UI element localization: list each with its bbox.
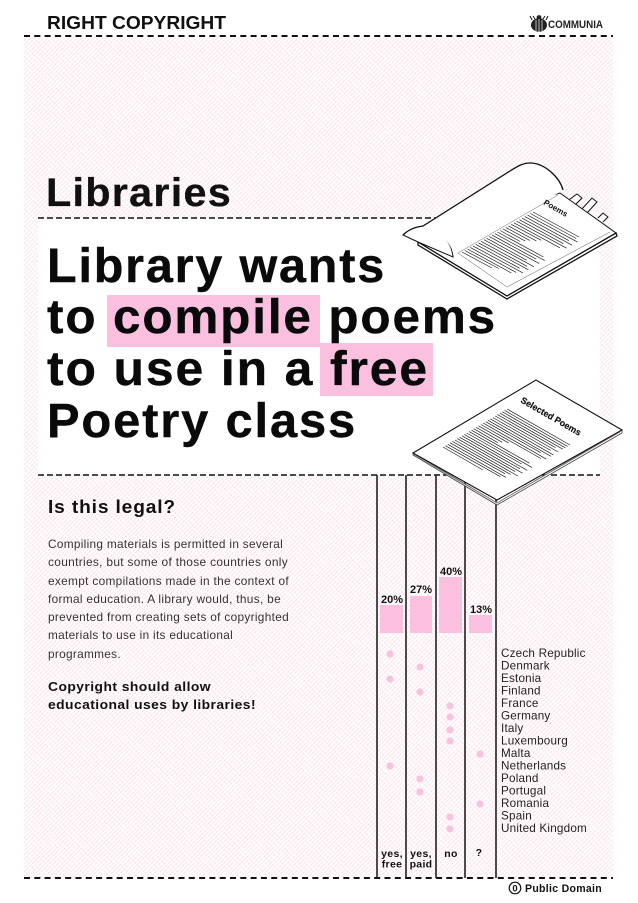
icon: open book of poems: Poems — [542, 198, 570, 219]
heading: Is this legal?: Is this legal? — [48, 497, 176, 517]
public domain mark: 0 — [512, 884, 518, 894]
icon: open book of poems — [403, 163, 617, 299]
column labels: yes, — [410, 848, 432, 860]
column labels: free — [382, 858, 402, 870]
country list: Malta — [501, 747, 531, 760]
body text: materials to use in its educational — [48, 629, 233, 642]
country list: Luxembourg — [501, 734, 568, 748]
main headline: to compile poems — [47, 291, 497, 344]
country list: Italy — [501, 722, 523, 735]
main headline: to use in a free — [47, 343, 429, 396]
column labels: yes, — [381, 848, 403, 860]
white title panel — [38, 218, 600, 475]
bar chart — [380, 566, 492, 633]
logo: COMMUNIA — [530, 15, 603, 32]
country list: France — [501, 697, 539, 710]
bar chart: 27% — [410, 584, 432, 596]
highlight: compile — [107, 295, 320, 347]
call to action: educational uses by libraries! — [48, 698, 256, 712]
country list: Denmark — [501, 660, 550, 672]
body text: exempt compilations made in the context of — [48, 575, 289, 588]
dot matrix — [386, 650, 484, 833]
country list: Portugal — [501, 784, 546, 798]
icon: selected poems document: Selected Poems — [519, 395, 583, 438]
bar chart: 40% — [440, 566, 462, 578]
body text: prevented from creating sets of copyrighted — [48, 611, 289, 624]
section heading: Libraries: Libraries — [46, 171, 232, 215]
bar chart: 20% — [381, 594, 403, 606]
country list: Finland — [501, 684, 541, 698]
country list: Spain — [501, 810, 532, 822]
column labels: no — [444, 848, 458, 860]
bar chart: 13% — [470, 604, 492, 616]
country list: Netherlands — [501, 760, 566, 772]
body text — [48, 538, 289, 661]
call to action — [48, 680, 256, 712]
country list: Germany — [501, 710, 550, 722]
highlight: free — [320, 343, 433, 396]
main headline — [47, 240, 497, 448]
body text: Compiling materials is permitted in several — [48, 538, 283, 551]
country list: United Kingdom — [501, 822, 587, 835]
logo: COMMUNIA: COMMUNIA — [548, 19, 603, 31]
main headline: Library wants — [47, 240, 386, 293]
chart: vertical column lines — [377, 475, 496, 878]
header title: RIGHT COPYRIGHT — [47, 12, 227, 33]
icon: selected poems document — [413, 380, 622, 505]
column labels — [381, 847, 482, 870]
country list: Czech Republic — [501, 647, 586, 660]
column labels: paid — [410, 858, 432, 870]
body text: programmes. — [48, 648, 121, 661]
country list: Romania — [501, 797, 549, 810]
call to action: Copyright should allow — [48, 680, 211, 694]
column labels: ? — [476, 847, 482, 859]
country list — [501, 647, 587, 835]
main headline: Poetry class — [47, 395, 357, 448]
body text: countries, but some of those countries only — [48, 556, 288, 569]
country list: Poland — [501, 772, 539, 785]
body text: formal education. A library would, thus, be — [48, 593, 281, 606]
country list: Estonia — [501, 672, 542, 685]
public domain mark: Public Domain — [525, 883, 602, 895]
